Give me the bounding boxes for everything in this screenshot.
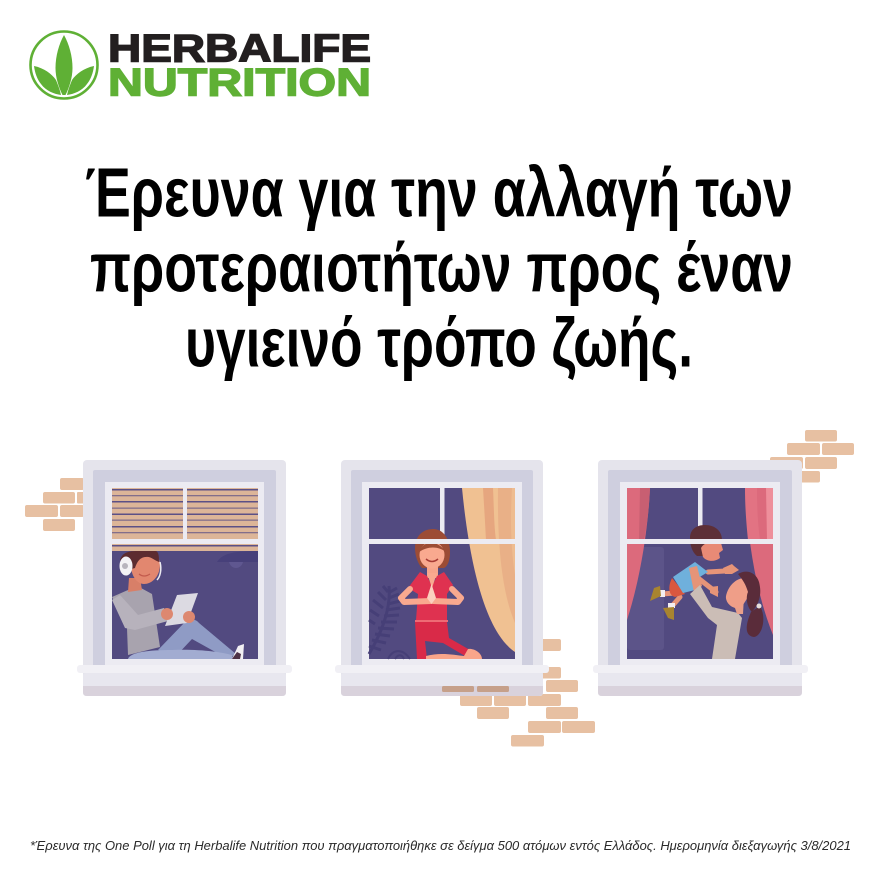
bricks: upper right wall (770, 430, 854, 482)
footnote: *Έρευνα της One Poll για τη Herbalife Nutrition που πραγματοποιήθηκε σε δείγμα 500 ατόμων εντός Ελλάδος. Ημερομηνία διεξαγωγής 3/8/2021 (30, 839, 851, 853)
icon: leaf ring (30, 32, 98, 98)
bricks: lower middle wall (460, 639, 595, 746)
wordmark: Nutrition: NUTRITION (108, 62, 371, 104)
lamp (217, 551, 258, 568)
bricks: left wall (25, 478, 84, 531)
window sills (77, 665, 808, 696)
title: υγιεινό τρόπο ζωής. (185, 304, 693, 382)
mother (690, 572, 763, 659)
curtain (462, 488, 515, 652)
panel: window with mother and child (598, 460, 802, 696)
blinds (112, 488, 258, 551)
curtains (627, 488, 773, 635)
logo: Herbalife Nutrition (30, 28, 371, 104)
man (112, 551, 244, 659)
wordmark: Herbalife: HERBALIFE (108, 28, 371, 70)
boy (650, 525, 739, 620)
bricks over middle sill (442, 686, 509, 692)
fern plant (369, 586, 410, 659)
panel: window with woman doing yoga (341, 460, 543, 696)
title (85, 154, 793, 382)
panel: window with man and tablet (83, 460, 286, 696)
woman (401, 529, 482, 659)
